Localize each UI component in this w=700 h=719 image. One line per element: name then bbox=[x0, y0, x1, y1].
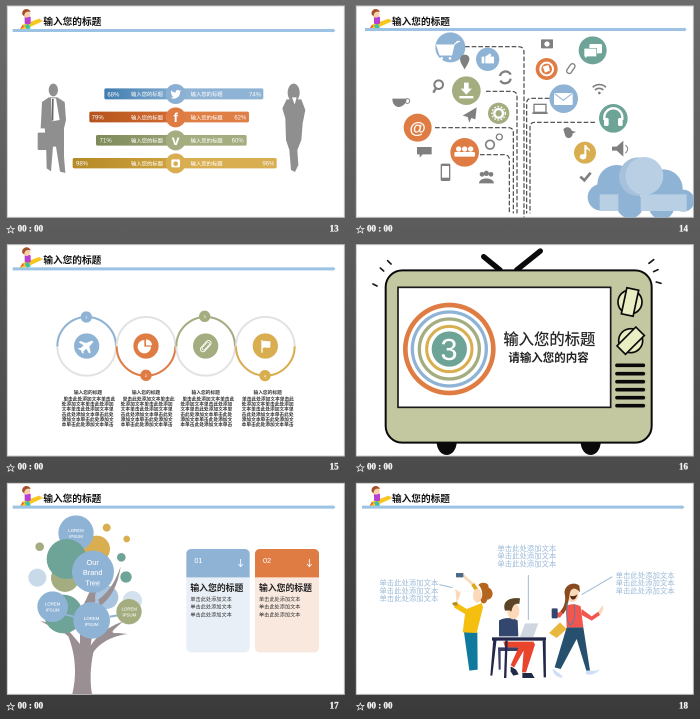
tree trunk bbox=[40, 592, 128, 694]
ring 3: paperclip: 3 bbox=[204, 314, 207, 319]
caption 4: 单击此处添加文本单击此 bbox=[242, 395, 294, 402]
ring 2: pie chart bbox=[117, 317, 175, 381]
section subtitle: 请输入您的内容 bbox=[508, 350, 589, 364]
bar row: twitter: 74% bbox=[249, 92, 262, 98]
bubble labels: IPSUM bbox=[46, 607, 60, 612]
caption 1: 单击此处添加文本单击此 bbox=[63, 395, 116, 402]
antennas bbox=[484, 251, 540, 270]
caption 4: 添加文本单击此处添加文 bbox=[242, 416, 294, 423]
slide 15: four ring process bbox=[7, 245, 344, 472]
bar row: twitter bbox=[104, 84, 263, 104]
mascot bbox=[20, 486, 44, 506]
bubble labels: LOREM bbox=[122, 607, 137, 612]
concentric rings with number: 3 bbox=[440, 333, 458, 367]
feet bbox=[437, 442, 601, 455]
left text block: 单击此处添加文本 bbox=[379, 586, 439, 595]
caption 1: 处添加文本单击此处添加 bbox=[62, 401, 114, 408]
left text block bbox=[379, 579, 439, 603]
center text block: 单击此处添加文本 bbox=[497, 544, 557, 553]
slide heading: 输入您的标题 bbox=[392, 16, 450, 28]
header arrow bbox=[362, 505, 685, 509]
colored icon: globe bbox=[536, 58, 558, 80]
caption 1: 输入您的标题 bbox=[74, 389, 102, 396]
bar row: twitter: 输入您的标题 bbox=[131, 90, 164, 98]
colored icon: thumbs up bbox=[476, 48, 499, 71]
bar row: twitter: 输入您的标题 bbox=[191, 90, 223, 98]
card 02: 单击此处添加文本 bbox=[259, 603, 301, 611]
right text block: 单击此处添加文本 bbox=[616, 587, 675, 596]
card 02: 单击此处添加文本 bbox=[259, 595, 301, 603]
caption 3: 添加文本单击此处添加文 bbox=[180, 416, 233, 423]
ring 1: plane bbox=[57, 311, 116, 376]
grey icons bbox=[392, 39, 628, 183]
colored icon: mail bbox=[549, 84, 578, 113]
bubble labels: IPSUM bbox=[85, 622, 99, 627]
slide footer: 17 bbox=[330, 700, 339, 710]
slide 13: social media comparison bbox=[7, 6, 344, 233]
colored icon: gear bbox=[488, 103, 509, 124]
caption 1 bbox=[62, 389, 116, 428]
slide footer: 00 : 00 bbox=[367, 462, 393, 472]
caption 2: 处添加文本单击此处添加 bbox=[121, 401, 173, 408]
right text block: 单击此处添加文本 bbox=[616, 579, 675, 588]
colored icon: people bbox=[450, 138, 479, 167]
signal ticks bbox=[373, 260, 661, 286]
woman silhouette bbox=[282, 84, 305, 172]
cloud bbox=[588, 157, 694, 219]
caption 3: 本单击此处添加文本单击 bbox=[180, 421, 233, 428]
bar row: instagram bbox=[73, 153, 277, 173]
colored icon: at sign bbox=[404, 114, 432, 142]
card 01: 单击此处添加文本 bbox=[190, 611, 232, 619]
mascot bbox=[20, 9, 44, 29]
slide heading: 输入您的标题 bbox=[392, 493, 450, 505]
bar row: facebook: 输入您的标题 bbox=[131, 113, 164, 121]
bar row: instagram: 输入您的标题 bbox=[191, 159, 223, 167]
caption 2: 单击此处添加文本单击此 bbox=[123, 395, 175, 402]
bar row: instagram: 96% bbox=[262, 162, 275, 168]
card 01: 单击此处添加文本 bbox=[190, 595, 232, 603]
caption 4: 击此处添加文本单击此处 bbox=[242, 411, 294, 418]
caption 2: 添加文本单击此处添加文 bbox=[121, 416, 173, 423]
bar row: vimeo: 60% bbox=[232, 139, 244, 145]
bar row: facebook: f bbox=[173, 110, 178, 125]
bar row: facebook: 62% bbox=[234, 116, 247, 122]
mascot bbox=[369, 486, 393, 506]
ring 2: pie chart: 2 bbox=[145, 373, 148, 378]
caption 1: 添加文本单击此处添加文 bbox=[62, 416, 114, 423]
caption 4: 本单击此处添加文本单击 bbox=[242, 421, 294, 428]
slide footer bbox=[7, 462, 339, 472]
colored icon: download bbox=[452, 76, 481, 105]
caption 2: 本单击此处添加文本单击 bbox=[121, 421, 173, 428]
speaker grille bbox=[617, 365, 643, 406]
header arrow bbox=[13, 505, 336, 509]
person: walking woman bbox=[549, 584, 603, 678]
card 02: 单击此处添加文本 bbox=[259, 611, 301, 619]
bar row: facebook: 输入您的标题 bbox=[191, 113, 223, 121]
bubble labels: LOREM bbox=[45, 601, 61, 606]
concentric rings with number bbox=[405, 305, 493, 393]
knob top bbox=[618, 288, 642, 316]
caption 4 bbox=[242, 389, 294, 428]
slide footer: 14 bbox=[679, 223, 688, 233]
caption 4: 输入您的标题 bbox=[253, 389, 282, 396]
bubble labels bbox=[45, 528, 137, 627]
ring 4: flag bbox=[236, 317, 295, 381]
caption 3: 击此处添加文本单击此处 bbox=[180, 411, 233, 418]
colored icon: chat bbox=[579, 36, 607, 64]
slide footer: 00 : 00 bbox=[18, 462, 44, 472]
colored icon: at sign: @ bbox=[410, 118, 426, 137]
slide heading: 输入您的标题 bbox=[43, 493, 102, 505]
right text block: 单击此处添加文本 bbox=[616, 571, 675, 580]
slide 18: people illustration bbox=[356, 483, 693, 710]
callout lines bbox=[439, 575, 612, 620]
caption 2: 击此处添加文本单击此处 bbox=[121, 411, 173, 418]
caption 3: 输入您的标题 bbox=[192, 389, 220, 396]
card 02 bbox=[255, 549, 319, 652]
person: yellow shirt bbox=[452, 573, 493, 671]
tv body bbox=[386, 270, 652, 443]
dashed connectors bbox=[435, 47, 595, 217]
slide footer bbox=[7, 223, 339, 233]
bar row: vimeo bbox=[96, 130, 247, 150]
slide footer: 16 bbox=[679, 462, 688, 472]
ring 1: plane: 1 bbox=[85, 315, 88, 320]
slide footer: 00 : 00 bbox=[367, 223, 393, 233]
ring 4: flag: 4 bbox=[264, 373, 267, 378]
center text block bbox=[497, 544, 557, 569]
slide footer: 13 bbox=[330, 223, 339, 233]
caption 4: 处添加文本单击此处添加 bbox=[242, 401, 294, 408]
caption 3: 单击此处添加文本单击此 bbox=[182, 395, 235, 402]
card 01: 01 bbox=[194, 556, 202, 565]
card 02: 02 bbox=[263, 556, 271, 565]
header arrow bbox=[13, 28, 336, 33]
caption 3: 文本单击此处添加文本单 bbox=[180, 406, 233, 413]
caption 3: 处添加文本单击此处添加 bbox=[180, 401, 233, 408]
slide footer: 00 : 00 bbox=[18, 223, 44, 233]
slide heading: 输入您的标题 bbox=[43, 254, 102, 266]
colored icon: cart bbox=[435, 32, 465, 62]
slide footer bbox=[357, 462, 688, 472]
bubble labels: IPSUM bbox=[69, 534, 83, 539]
card 01 bbox=[186, 549, 250, 652]
center text block: 单击此处添加文本 bbox=[497, 552, 557, 561]
slide 16: television section divider bbox=[356, 245, 693, 472]
section title: 输入您的标题 bbox=[503, 331, 595, 348]
header arrow bbox=[365, 27, 687, 32]
card 02: 输入您的标题 bbox=[259, 582, 312, 593]
slide 14: icon tree bbox=[356, 6, 694, 233]
caption 1: 本单击此处添加文本单击 bbox=[62, 421, 114, 428]
bar row: vimeo: 71% bbox=[100, 139, 112, 145]
man silhouette bbox=[38, 84, 66, 173]
left text block: 单击此处添加文本 bbox=[379, 579, 439, 588]
left text block: 单击此处添加文本 bbox=[379, 594, 439, 603]
bar row: vimeo: 输入您的标题 bbox=[131, 137, 164, 145]
tv screen bbox=[398, 287, 611, 407]
card 01: 输入您的标题 bbox=[190, 582, 243, 593]
bar row: instagram: 输入您的标题 bbox=[131, 159, 164, 167]
bubble labels: Brand bbox=[83, 568, 102, 577]
caption 2: 文本单击此处添加文本单 bbox=[121, 406, 173, 413]
caption 2: 输入您的标题 bbox=[132, 389, 160, 396]
slide footer: 15 bbox=[330, 462, 339, 472]
right text block bbox=[616, 571, 675, 596]
caption 3 bbox=[180, 389, 235, 428]
bubble labels: IPSUM bbox=[122, 613, 137, 618]
slide 17: brand tree bbox=[7, 483, 344, 710]
colored icon: headphones bbox=[599, 104, 628, 133]
bar row: instagram: 98% bbox=[76, 162, 89, 168]
caption 2 bbox=[121, 389, 175, 428]
caption 4: 文本单击此处添加文本单 bbox=[242, 406, 294, 413]
slide heading: 输入您的标题 bbox=[43, 16, 102, 28]
bar row: facebook: 79% bbox=[92, 116, 104, 122]
slide footer bbox=[357, 700, 688, 710]
tree bubbles bbox=[28, 515, 142, 639]
colored icon: music note bbox=[574, 142, 596, 164]
knob bottom bbox=[617, 327, 644, 354]
card 01: 单击此处添加文本 bbox=[190, 603, 232, 611]
mascot bbox=[20, 247, 44, 268]
slide footer: 00 : 00 bbox=[367, 700, 393, 710]
bubble labels: Our bbox=[87, 558, 99, 567]
bar row: twitter: 68% bbox=[107, 92, 120, 98]
bubble labels: LOREM bbox=[84, 616, 100, 621]
bubble labels: LOREM bbox=[68, 528, 84, 533]
bar row: vimeo: 输入您的标题 bbox=[191, 137, 223, 145]
slide footer: 00 : 00 bbox=[18, 700, 44, 710]
ring 3: paperclip bbox=[176, 311, 235, 376]
caption 1: 文本单击此处添加文本单 bbox=[62, 406, 114, 413]
person: seated at laptop bbox=[490, 598, 546, 678]
bar row: facebook bbox=[89, 107, 249, 127]
bar row: vimeo: v bbox=[172, 132, 180, 148]
caption 1: 击此处添加文本单击此处 bbox=[62, 411, 114, 418]
slide footer: 18 bbox=[679, 700, 688, 710]
slide footer bbox=[7, 700, 339, 710]
bubble labels: Tree bbox=[85, 578, 100, 587]
mascot bbox=[369, 9, 393, 29]
center text block: 单击此处添加文本 bbox=[497, 560, 557, 569]
header arrow bbox=[13, 267, 336, 271]
slide footer bbox=[357, 223, 688, 233]
